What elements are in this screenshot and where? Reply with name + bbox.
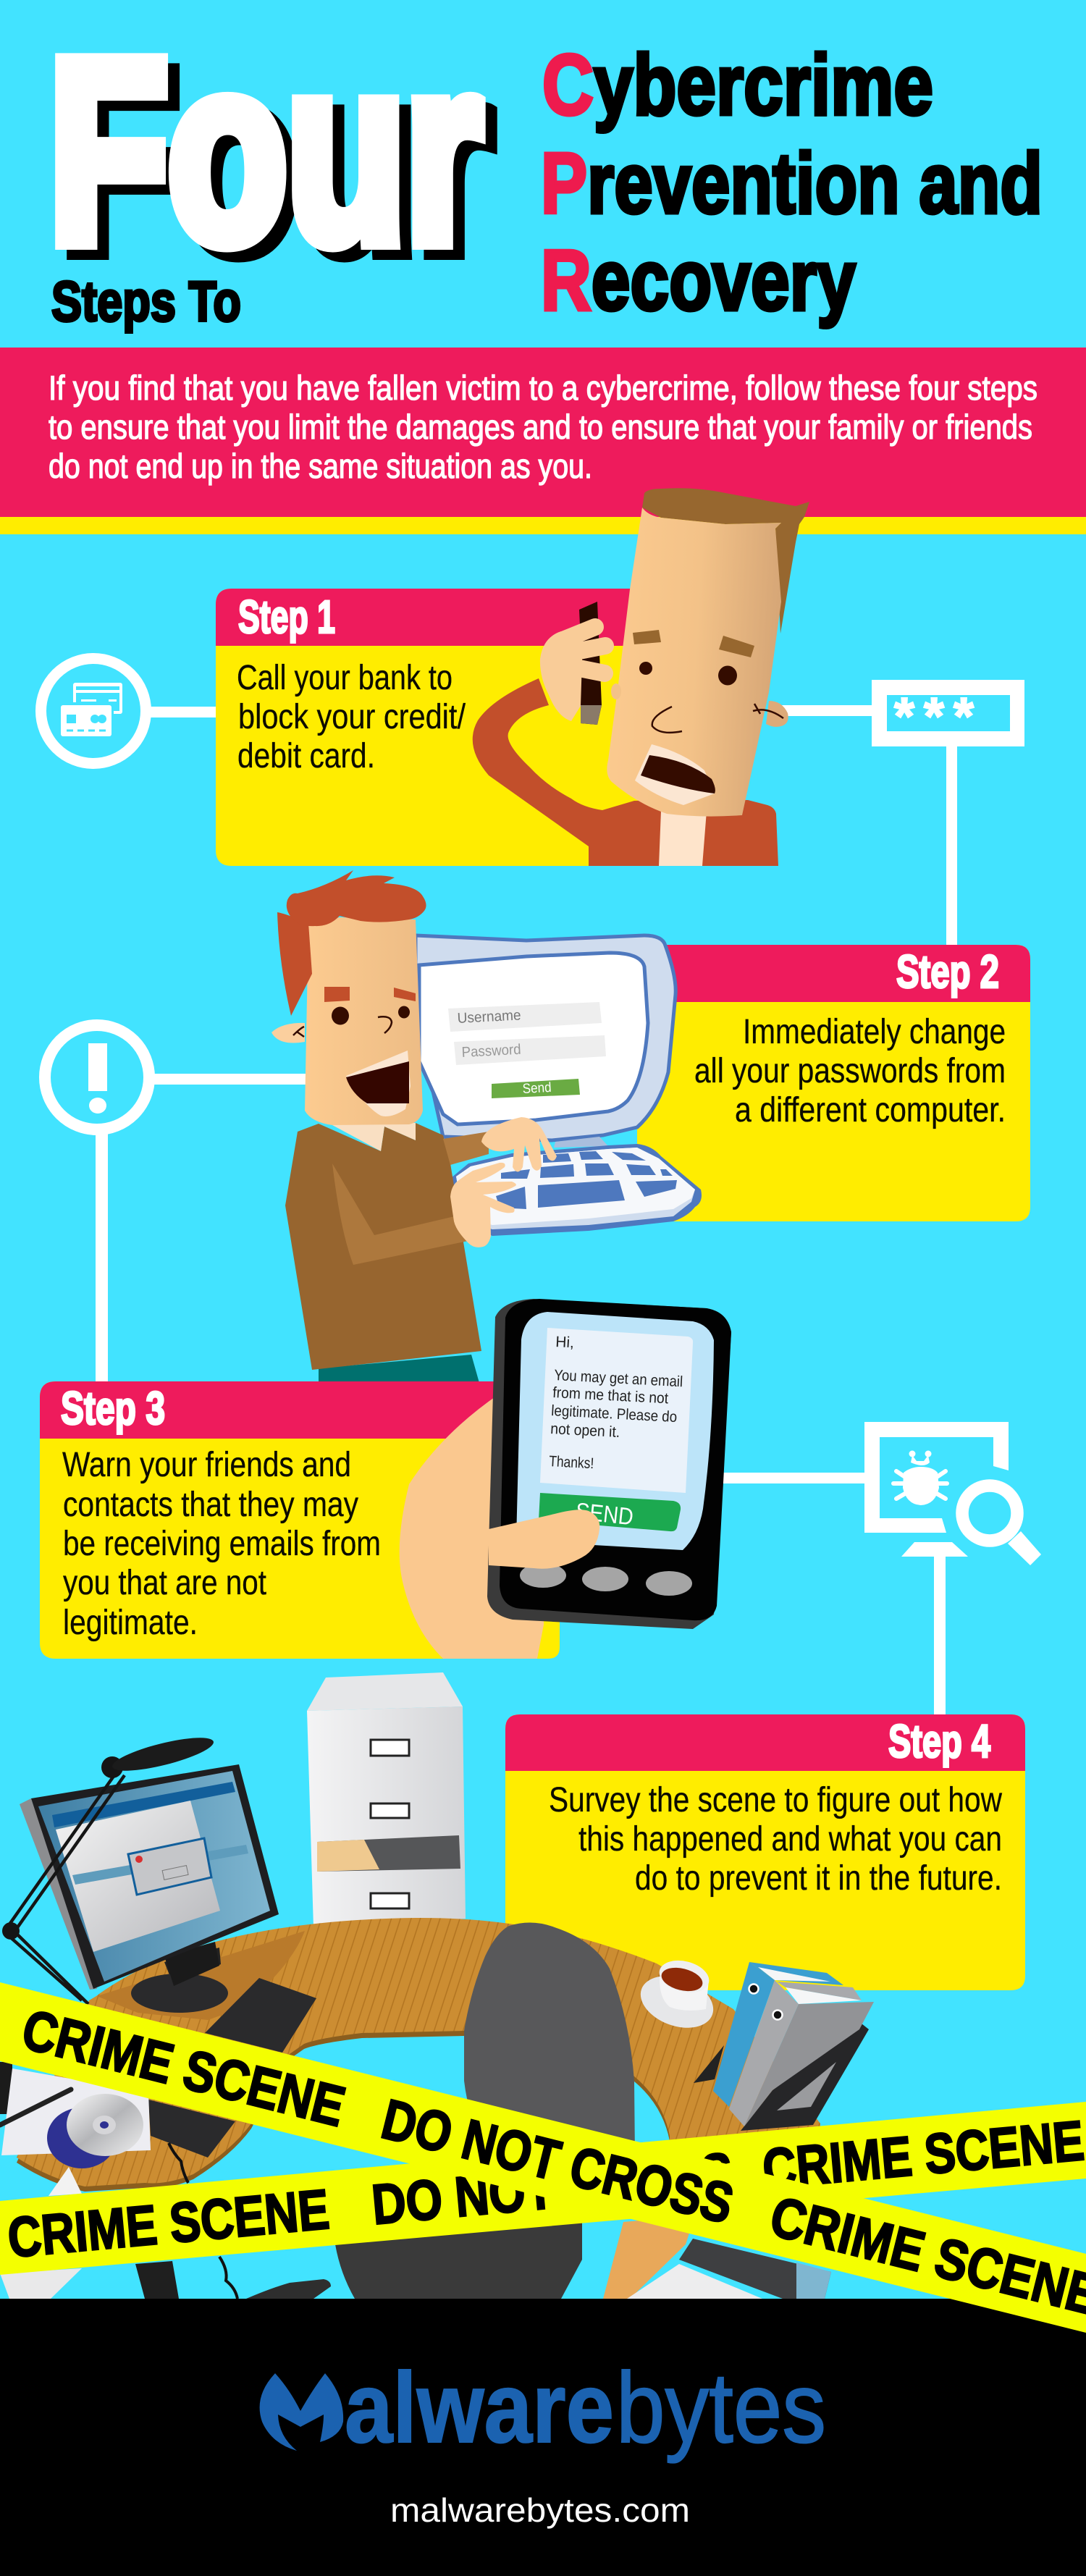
title: Cybercrime Prevention and Recovery: Cybercrime: [542, 37, 933, 133]
illustration: hand with phone: SEND: [574, 1497, 635, 1530]
illustration: binders: [694, 1962, 874, 2131]
intro band: do not end up in the same situation as you.: [49, 447, 592, 485]
step 4 text: [549, 1781, 1002, 1898]
illustration: computer: [416, 935, 702, 1236]
title: Four Steps To: Four: [61, 17, 493, 306]
step 1 text: [237, 659, 466, 775]
panel: step 1: [216, 589, 724, 866]
icon: password box: ***: [894, 688, 974, 746]
step 3 text: be receiving emails from: [63, 1525, 381, 1563]
logo wordmark: [345, 2352, 826, 2464]
phone message: not open it.: [550, 1420, 620, 1441]
website: malwarebytes.com: [390, 2491, 690, 2529]
phone message: from me that is not: [552, 1384, 669, 1407]
step 3 text: you that are not: [63, 1564, 266, 1602]
phone message: Thanks!: [549, 1453, 594, 1472]
crime scene tape: descending: CRIME SCENE: [16, 1997, 351, 2139]
icon: bug on monitor with magnifier: [864, 1422, 1041, 1565]
step 4 text: Survey the scene to figure out how: [549, 1781, 1002, 1819]
icon: password box: [872, 680, 1024, 746]
step 1 text: debit card.: [237, 737, 375, 775]
illustration: desktop monitor and lamp: [2, 1731, 316, 2053]
crime scene tape: ascending: CRIME SCENE: [5, 2177, 332, 2270]
illustration: coffee cup: [634, 1956, 720, 2037]
illustration: man at computer: [272, 870, 557, 1383]
title: Cybercrime Prevention and Recovery: [541, 37, 1043, 329]
illustration: paper, cd and keyboard: [0, 2062, 235, 2183]
step 3 text: [62, 1446, 381, 1642]
title: Four Steps To: Four: [49, 7, 481, 295]
step 4 heading: Step 4: [888, 1715, 990, 1767]
icon: credit cards: [41, 659, 146, 763]
illustration: office chair: [335, 1922, 635, 2299]
step 1 heading: Step 1: [238, 591, 335, 643]
bug: [893, 1451, 947, 1505]
logo wordmark: bytes: [616, 2352, 826, 2464]
phone message: legitimate. Please do: [551, 1402, 678, 1426]
illustration: desk: [17, 1918, 820, 2299]
panel: step 3: [40, 1381, 560, 1659]
step 1 text: Call your bank to: [237, 659, 452, 697]
step 2 text: Immediately change: [743, 1013, 1006, 1051]
step 2 text: [694, 1013, 1006, 1129]
title: Four Steps To: Steps To: [51, 269, 241, 333]
footer: [0, 2299, 1086, 2576]
illustration: computer: Send: [522, 1080, 552, 1097]
step 3 text: Warn your friends and: [62, 1446, 351, 1484]
step 3 text: contacts that they may: [63, 1486, 358, 1524]
illustration: filing cabinet: [307, 1672, 466, 1927]
illustration: computer: Username: [457, 1007, 521, 1027]
step 1 text: block your credit/: [238, 698, 466, 736]
hand: [540, 627, 605, 721]
illustration: computer: Password: [461, 1042, 521, 1061]
step 4 text: do to prevent it in the future.: [635, 1859, 1002, 1898]
illustration: floor items: [0, 2167, 831, 2299]
step 2 text: a different computer.: [735, 1091, 1006, 1129]
phone message: [549, 1334, 683, 1472]
logo mark: [260, 2373, 343, 2451]
crime scene tape: ascending: [0, 2102, 1086, 2275]
logo wordmark: alware: [345, 2352, 614, 2464]
step 2 text: all your passwords from: [694, 1052, 1006, 1090]
step 3 text: legitimate.: [63, 1604, 198, 1642]
step 3 heading: Step 3: [61, 1382, 165, 1434]
phone message: Hi,: [555, 1334, 575, 1351]
crime scene tape: descending: [0, 1982, 1086, 2333]
phone message: You may get an email: [554, 1367, 683, 1390]
panel: step 2: [637, 945, 1030, 1221]
connector lines: [96, 705, 957, 1717]
step 2 heading: Step 2: [896, 946, 999, 998]
illustration: hand with phone: [400, 1299, 731, 1659]
lower hand: [450, 1163, 516, 1247]
intro band: [0, 348, 1086, 534]
panel: step 4: [505, 1714, 1025, 1990]
icon: alert: [45, 1025, 149, 1129]
crime scene tape: ascending: DO NOT CROSS: [369, 2140, 736, 2236]
title: Cybercrime Prevention and Recovery: Recovery: [541, 232, 856, 329]
upper hand: [481, 1117, 557, 1171]
illustration: man on the phone: [473, 488, 809, 866]
crime scene tape: descending: DO NOT CROSS: [376, 2087, 740, 2236]
step 4 text: this happened and what you can: [578, 1820, 1002, 1859]
